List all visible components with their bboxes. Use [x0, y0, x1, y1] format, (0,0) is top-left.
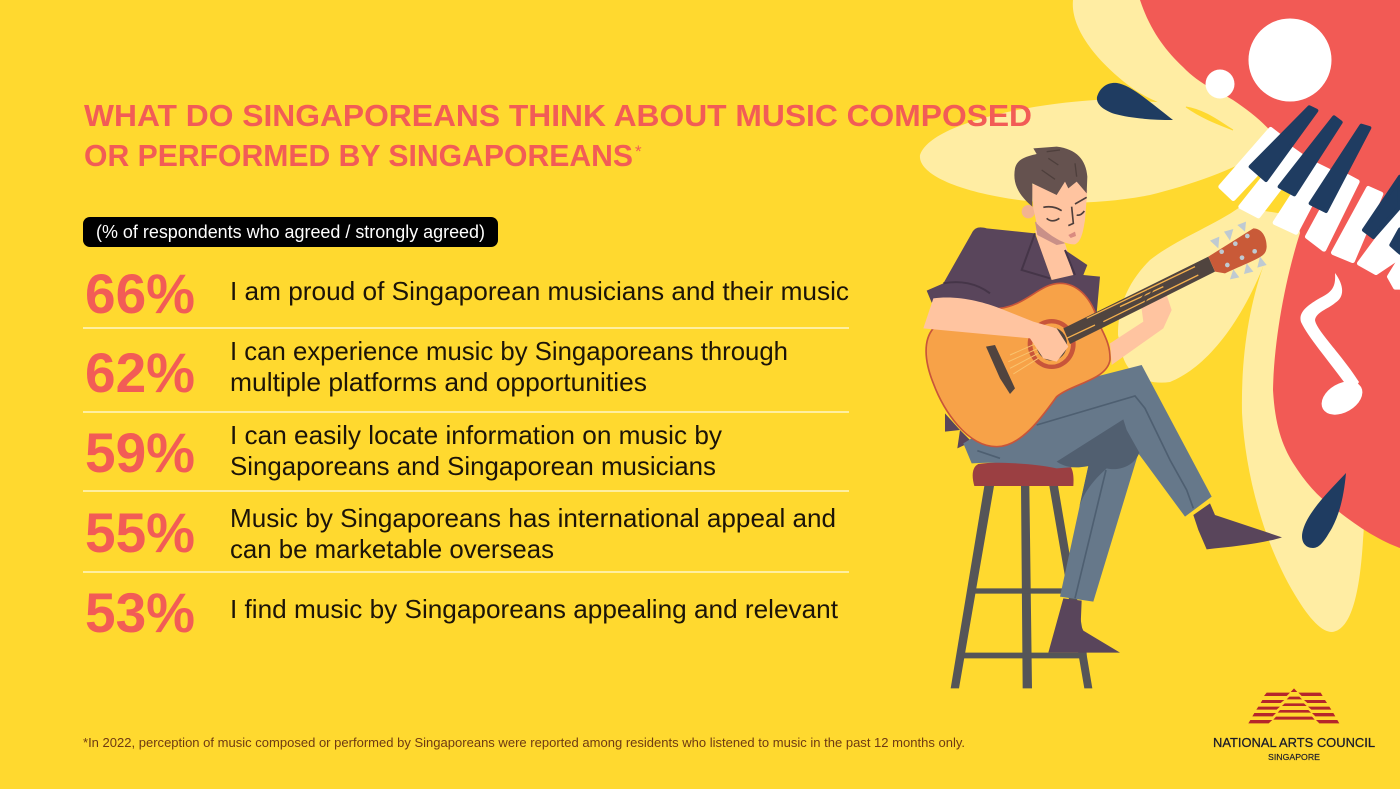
torso, head, guitar [923, 147, 1267, 447]
subtitle pill: (% of respondents who agreed / strongly agreed) [96, 222, 485, 242]
title: OR PERFORMED BY SINGAPOREANS [84, 138, 633, 173]
title [84, 98, 1032, 173]
row: 53%: I find music by Singaporeans appealing and relevant [230, 594, 839, 624]
row: 53%: 53% [85, 581, 195, 644]
row: 66% [85, 262, 849, 325]
logo: National Arts Council: NATIONAL ARTS COUNCIL [1213, 735, 1375, 750]
subtitle pill [83, 217, 498, 247]
icon: piano keys [1221, 107, 1400, 287]
title: WHAT DO SINGAPOREANS THINK ABOUT MUSIC COMPOSED [84, 98, 1032, 133]
panel: red backdrop [1140, 0, 1400, 548]
row: 59% [85, 420, 722, 484]
row: 62% [85, 336, 788, 404]
logo: National Arts Council: SINGAPORE [1268, 753, 1320, 762]
row: 55%: Music by Singaporeans has international appeal and [230, 503, 836, 533]
title: * [635, 142, 642, 161]
logo: National Arts Council [1213, 688, 1375, 762]
decorative background shapes [920, 0, 1380, 632]
icon: navy drop bottom [1302, 473, 1346, 548]
row: 66%: I am proud of Singaporean musicians and their music [230, 276, 849, 306]
row: 62%: I can experience music by Singaporeans through [230, 336, 788, 366]
row: 62%: multiple platforms and opportunities [230, 367, 647, 397]
footnote: *In 2022, perception of music composed or performed by Singaporeans were reported among residents who listened to music in the past 12 months only. [83, 736, 965, 750]
row: 53% [85, 581, 839, 644]
icon: large white circle [1248, 18, 1332, 102]
icon: navy drop top [1097, 83, 1173, 120]
row: 66%: 66% [85, 262, 195, 325]
stool [951, 462, 1092, 688]
row: 59%: 59% [85, 421, 195, 484]
row: 55% [85, 501, 836, 564]
row: 55%: can be marketable overseas [230, 534, 554, 564]
row: 59%: Singaporeans and Singaporean musicians [230, 451, 716, 481]
illustration: guitarist on stool [923, 147, 1282, 688]
row: 59%: I can easily locate information on music by [230, 420, 722, 450]
icon: small white circle [1206, 70, 1234, 98]
row: 55%: 55% [85, 501, 195, 564]
legs and boots [945, 365, 1282, 653]
row: 62%: 62% [85, 341, 195, 404]
icon: music note [1300, 273, 1368, 422]
